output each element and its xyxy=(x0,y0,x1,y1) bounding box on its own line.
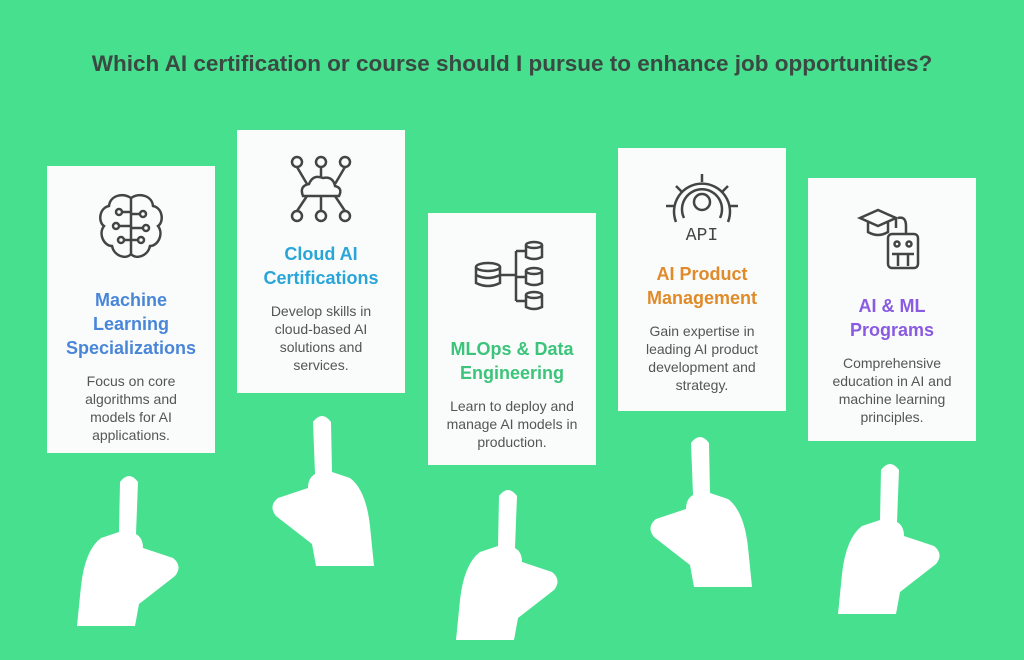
card: AI & ML programs: Comprehensive education in AI and machine learning principles. xyxy=(832,355,952,425)
card: MLOps: MLOps & Data Engineering xyxy=(450,339,574,383)
card: AI & ML programs: AI & ML Programs xyxy=(850,296,934,340)
card: machine learning: Machine Learning Specializations xyxy=(66,290,196,358)
card: machine learning xyxy=(47,166,215,453)
card: AI & ML programs xyxy=(808,178,976,441)
icon: gear API: API xyxy=(686,226,718,246)
icon: grad robot xyxy=(857,208,920,270)
hand 5 xyxy=(838,464,940,614)
hand 1 xyxy=(77,476,179,626)
card: product management xyxy=(618,148,786,411)
card: MLOps: Learn to deploy and manage AI models in production. xyxy=(447,398,577,450)
card: product management: Gain expertise in leading AI product development and strategy. xyxy=(646,323,758,393)
icon: databases xyxy=(474,240,544,310)
hand 4 xyxy=(650,437,752,587)
hand 3 xyxy=(456,490,558,640)
icon: brain xyxy=(99,194,163,258)
card: cloud AI: Develop skills in cloud-based AI solutions and services. xyxy=(271,303,371,373)
card: machine learning: Focus on core algorithms and models for AI applications. xyxy=(85,373,177,443)
icon: cloud network xyxy=(290,156,352,222)
card: cloud AI: Cloud AI Certifications xyxy=(263,244,379,288)
icon: gear API xyxy=(666,174,738,246)
card: MLOps xyxy=(428,213,596,465)
card: cloud AI xyxy=(237,130,405,393)
hand 2 xyxy=(272,416,374,566)
card: product management: AI Product Management xyxy=(647,264,757,308)
title: Which AI certification or course should I pursue to enhance job opportunities? xyxy=(92,51,932,76)
